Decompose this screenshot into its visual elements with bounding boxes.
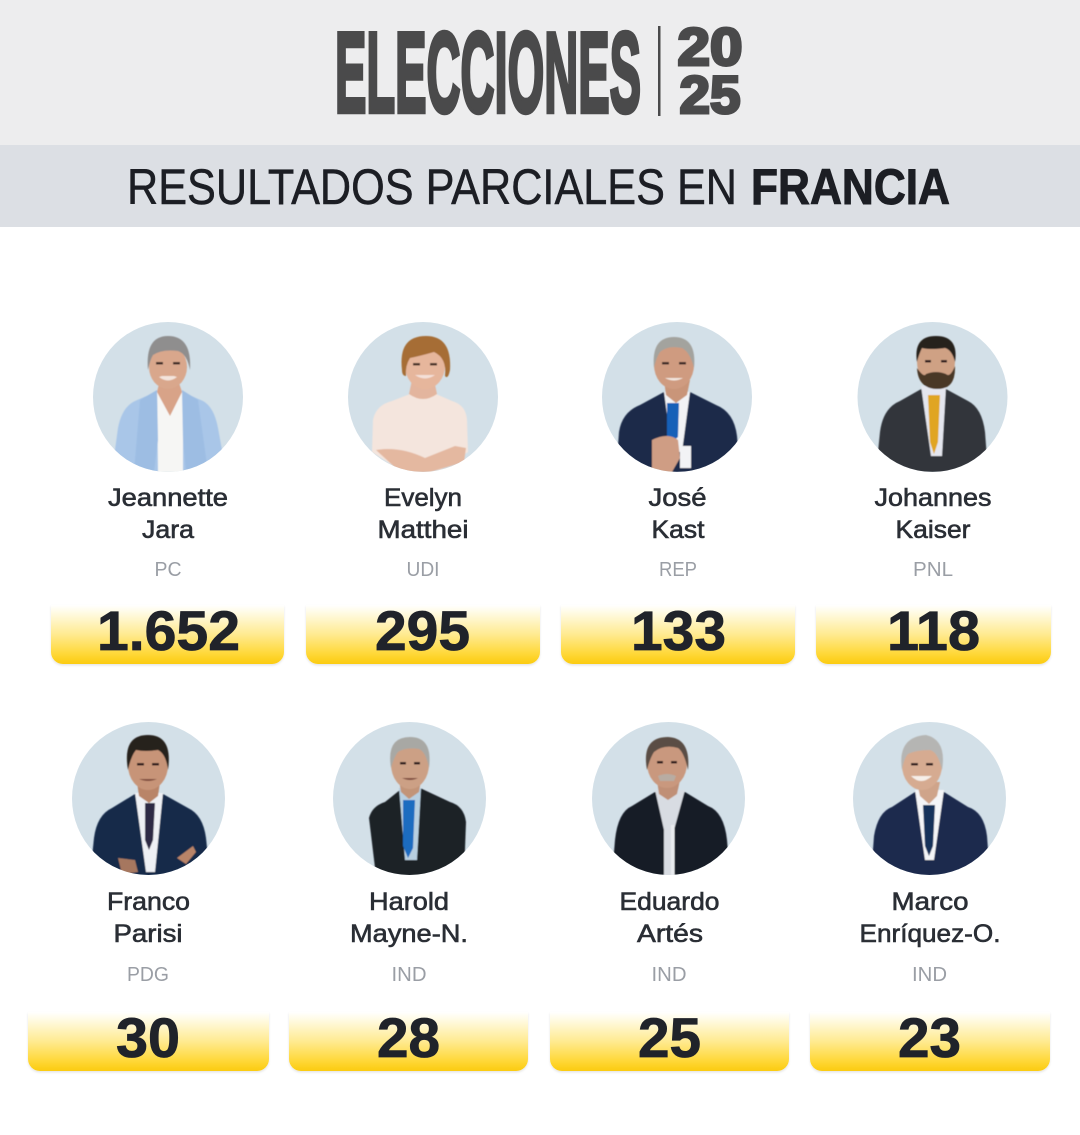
year: 20: 20 (678, 18, 742, 77)
name: Harold Mayne-N.: Mayne-N. (350, 920, 468, 948)
vote box: 23 (810, 1006, 1050, 1071)
header band (0, 0, 1080, 145)
name: Eduardo Artés: Eduardo (620, 888, 720, 916)
name: Harold Mayne-N. (350, 888, 468, 948)
name: José Kast (648, 484, 706, 544)
vote box: 118: 118 (887, 599, 980, 662)
name: Marco Enríquez-O.: Marco (892, 888, 968, 916)
subtitle text: RESULTADOS PARCIALES EN (127, 159, 737, 215)
portrait: Mayne-Nicholls (333, 722, 486, 876)
candidate: Johannes Kaiser (816, 322, 1051, 664)
name: José Kast: Kast (652, 516, 705, 544)
name: Jeannette Jara (108, 484, 228, 544)
subtitle band (0, 145, 1080, 227)
vote box: 295: 295 (375, 599, 470, 662)
party: PC: PC (154, 559, 182, 581)
name: Johannes Kaiser (874, 484, 992, 544)
vote box: 28: 28 (377, 1006, 440, 1069)
party: PDG: PDG (127, 964, 169, 986)
vote box: 133 (561, 599, 795, 664)
name: Eduardo Artés (620, 888, 720, 948)
party: IND: IND (912, 964, 947, 986)
title divider (658, 26, 660, 116)
vote box: 30 (28, 1006, 269, 1071)
party: IND: IND (392, 964, 426, 986)
party: IND: IND (652, 964, 686, 986)
name: José Kast: José (648, 484, 706, 512)
name: Marco Enríquez-O. (860, 888, 1000, 948)
vote box: 133: 133 (631, 599, 726, 662)
vote box: 295 (306, 599, 540, 664)
portrait: Enríquez-Ominami (853, 722, 1006, 876)
portrait: Artés (592, 722, 745, 876)
name: Jeannette Jara: Jara (142, 516, 194, 544)
portrait: Parisi (72, 722, 225, 876)
party: REP: REP (659, 559, 697, 581)
vote box: 1.652: 1.652 (97, 599, 240, 662)
vote box: 25 (550, 1006, 789, 1071)
portrait: Matthei (348, 322, 498, 472)
party: UDI: UDI (406, 559, 440, 581)
name: Johannes Kaiser: Kaiser (896, 516, 970, 544)
vote box: 30: 30 (116, 1006, 180, 1069)
year: 25: 25 (680, 66, 740, 125)
name: Harold Mayne-N.: Harold (369, 888, 449, 916)
name: Franco Parisi: Parisi (114, 920, 182, 948)
name: Franco Parisi (107, 888, 190, 948)
name: Evelyn Matthei (378, 484, 468, 544)
candidate: Harold Mayne-N. (289, 722, 528, 1071)
name: Jeannette Jara: Jeannette (108, 484, 228, 512)
name: Eduardo Artés: Artés (637, 920, 703, 948)
vote box: 118 (816, 599, 1051, 664)
header band: ELECCIONES (335, 10, 641, 137)
candidate: Marco Enríquez-O. (810, 722, 1050, 1071)
candidate: Evelyn Matthei (306, 322, 540, 664)
portrait: Kast (602, 322, 752, 472)
vote box: 25: 25 (638, 1006, 701, 1069)
vote box: 1.652 (51, 599, 284, 664)
portrait: Kaiser (858, 322, 1008, 472)
candidate: Eduardo Artés (550, 722, 789, 1071)
candidate: Jeannette Jara (51, 322, 284, 664)
name: Marco Enríquez-O.: Enríquez-O. (860, 920, 1000, 948)
vote box: 23: 23 (898, 1006, 961, 1069)
name: Johannes Kaiser: Johannes (874, 484, 992, 512)
name: Franco Parisi: Franco (107, 888, 190, 916)
name: Evelyn Matthei: Matthei (378, 516, 468, 544)
name: Evelyn Matthei: Evelyn (384, 484, 462, 512)
vote box: 28 (289, 1006, 528, 1071)
party: PNL: PNL (913, 559, 953, 581)
portrait: Jara (93, 322, 243, 472)
candidate: Franco Parisi (28, 722, 269, 1071)
subtitle country: FRANCIA (751, 159, 950, 215)
candidate: José Kast (561, 322, 795, 664)
